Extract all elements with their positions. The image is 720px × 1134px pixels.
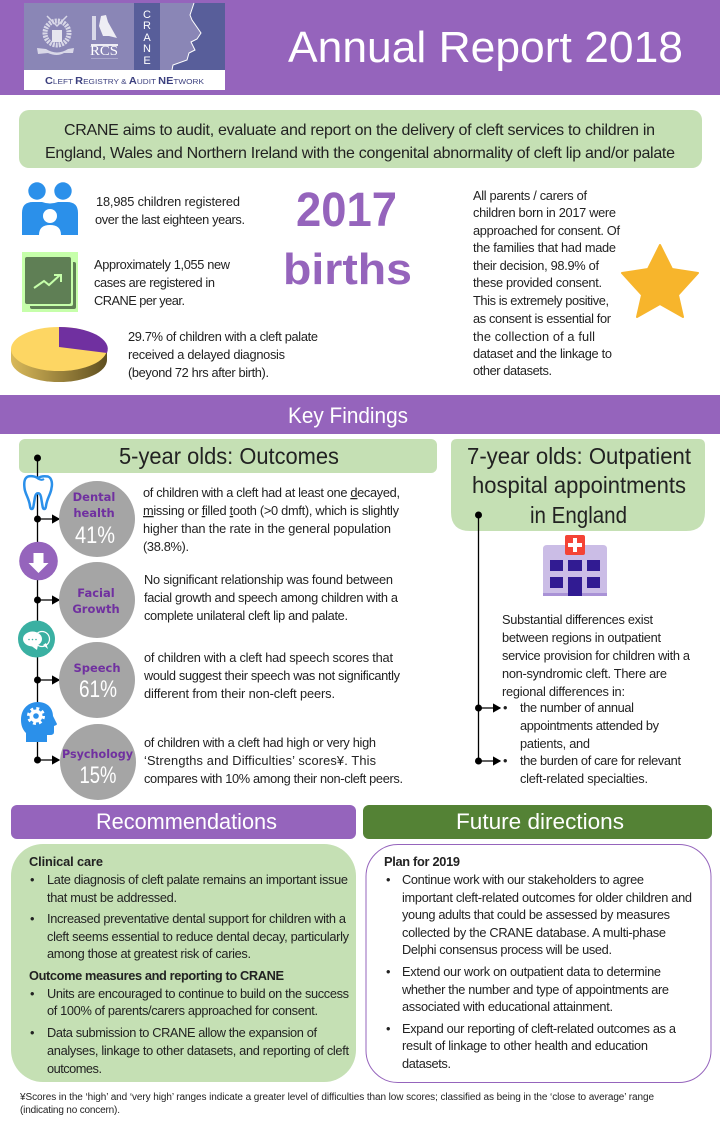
heading: 7-year olds: 7-year olds: Outpatient xyxy=(467,443,692,469)
text: outpatient differences xyxy=(502,612,691,786)
panel: future directions xyxy=(366,844,711,1082)
heading: Future directions xyxy=(363,805,712,839)
heading: 5-year olds xyxy=(19,439,437,473)
text: consent: All parents / carers of xyxy=(473,188,587,203)
heading: Future directions: Future directions xyxy=(456,809,624,834)
panel: recommendations: Late diagnosis of cleft palate remains an important issue xyxy=(47,872,348,887)
intro banner: England, Wales and Northern Ireland with the congenital abnormality of cleft lip and/or palate xyxy=(45,145,675,162)
stat: new cases: cases are registered in xyxy=(94,275,215,290)
panel: recommendations: that must be addressed. xyxy=(47,890,177,905)
logo: CRANE: CLEFT REGISTRY & AUDIT NETWORK xyxy=(45,76,204,87)
text: consent: children born in 2017 were xyxy=(473,205,616,220)
panel: future directions: Plan for 2019 xyxy=(384,854,460,869)
panel: recommendations xyxy=(11,844,356,1082)
panel: recommendations: • xyxy=(30,1025,34,1040)
panel: future directions: important cleft-related outcomes for older children and xyxy=(402,890,692,905)
text: consent: other datasets. xyxy=(473,363,552,378)
panel: future directions: Continue work with our stakeholders to agree xyxy=(402,872,644,887)
panel: future directions: datasets. xyxy=(402,1056,451,1071)
heading: 7-year olds xyxy=(451,439,705,531)
icon: down arrow xyxy=(19,542,58,580)
outcome: speech: different from their non-cleft peers. xyxy=(144,686,335,701)
panel: future directions: • xyxy=(386,872,390,887)
text: consent xyxy=(473,188,620,378)
footnote: (indicating no concern). xyxy=(20,1105,120,1116)
logo: CRANE: RCS xyxy=(90,44,118,59)
panel: future directions: result of linkage to other health and education xyxy=(402,1038,648,1053)
panel: recommendations: cleft seems essential to reduce dental decay, particularly xyxy=(47,929,350,944)
panel: future directions: • xyxy=(386,964,390,979)
text: outpatient differences: the burden of care for relevant xyxy=(520,753,681,768)
panel: recommendations: Clinical care xyxy=(29,854,103,869)
outcome: dental health: missing or filled tooth (>0 dmft), which is slightly xyxy=(143,503,400,518)
heading: 5-year olds: 5-year olds: Outcomes xyxy=(119,443,339,469)
panel: future directions: Delphi consensus process will be used. xyxy=(402,942,612,957)
panel: future directions: Expand our reporting of cleft-related outcomes as a xyxy=(402,1021,677,1036)
panel: recommendations: Outcome measures and reporting to CRANE xyxy=(29,968,284,983)
icon: star xyxy=(622,245,698,317)
header band xyxy=(0,0,720,95)
text: consent: the collection of a full xyxy=(473,329,595,344)
panel: recommendations: • xyxy=(30,986,34,1001)
text: consent: their decision, 98.9% of xyxy=(473,258,599,273)
outcome: facial growth: complete unilateral cleft lip and palate. xyxy=(144,608,348,623)
outcome: dental health: 41% xyxy=(75,522,115,549)
text: outpatient differences: the number of annual xyxy=(520,700,634,715)
outcome: dental health: higher than the rate in the general population xyxy=(143,521,391,536)
panel: recommendations: Data submission to CRANE allow the expansion of xyxy=(47,1025,317,1040)
stat: delayed diagnosis xyxy=(128,329,318,380)
footnote xyxy=(19,1092,654,1116)
logo: CRANE: E xyxy=(143,55,151,67)
text: consent: dataset and the linkage to xyxy=(473,346,612,361)
intro banner: CRANE aims to audit, evaluate and report on the delivery of cleft services to children in xyxy=(64,122,655,139)
panel: future directions: collected by the CRANE database. A multi-phase xyxy=(402,925,666,940)
text: outpatient differences: • xyxy=(503,700,507,715)
pie chart: delayed diagnosis xyxy=(11,327,108,382)
icon: head with gear xyxy=(21,702,57,742)
outcome: facial growth xyxy=(59,562,399,638)
stat: delayed diagnosis: 29.7% of children with a cleft palate xyxy=(128,329,318,344)
text: consent: the families that had made xyxy=(473,240,616,255)
stat: registered children: over the last eighteen years. xyxy=(95,212,245,227)
outcome: dental health xyxy=(59,481,400,557)
outcome: facial growth: facial growth and speech among children with a xyxy=(144,590,399,605)
text: outpatient differences: • xyxy=(503,753,507,768)
text: consent: approached for consent. Of xyxy=(473,223,620,238)
stat: delayed diagnosis: (beyond 72 hrs after birth). xyxy=(128,365,269,380)
outcome: speech: would suggest their speech was not significantly xyxy=(143,668,401,683)
panel: recommendations: outcomes. xyxy=(47,1061,102,1076)
panel: recommendations: of 100% of parents/carers approached for consent. xyxy=(47,1003,318,1018)
text: outpatient differences: between regions in outpatient xyxy=(502,630,661,645)
outcome: facial growth: Facial xyxy=(77,586,115,600)
text: consent: as consent is essential for xyxy=(473,311,612,326)
logo: CRANE: C xyxy=(143,9,151,21)
text: outpatient differences: service provision for children with a xyxy=(502,648,691,663)
outcome: psychology: 15% xyxy=(80,762,116,789)
outcome: psychology: Psychology xyxy=(62,747,133,761)
section bar: Key Findings: Key Findings xyxy=(288,403,408,428)
text: consent: This is extremely positive, xyxy=(473,293,609,308)
logo: CRANE: R xyxy=(143,20,151,32)
panel: recommendations: • xyxy=(30,911,34,926)
text: outpatient differences: cleft-related specialties. xyxy=(520,771,648,786)
text: outpatient differences: patients, and xyxy=(520,736,590,751)
outcome: dental health: health xyxy=(73,506,115,520)
icon: hospital xyxy=(543,535,607,596)
outcome: psychology: ‘Strengths and Difficulties’ scores¥. This xyxy=(144,753,376,768)
outcome: dental health: Dental xyxy=(73,490,115,504)
outcome: dental health: of children with a cleft had at least one decayed, xyxy=(143,485,400,500)
stat: new cases: CRANE per year. xyxy=(94,293,185,308)
stat: new cases xyxy=(94,257,231,308)
logo: CRANE: A xyxy=(143,32,151,44)
outcome: facial growth: No significant relationship was found between xyxy=(144,572,393,587)
panel: future directions: whether the number and type of appointments are xyxy=(401,982,669,997)
icon: speech bubbles xyxy=(18,620,55,658)
timeline: outpatient xyxy=(475,512,500,764)
footnote: ¥Scores in the ‘high’ and ‘very high’ ranges indicate a greater level of difficulties than low scores; classified as being in the ‘close to average’ range xyxy=(19,1092,654,1103)
panel: recommendations: Increased preventative dental support for children with a xyxy=(47,911,347,926)
timeline: outcomes xyxy=(34,454,59,764)
heading: 2017 births: births xyxy=(283,245,412,294)
icon: family xyxy=(22,182,78,235)
heading: 2017 births: 2017 xyxy=(296,184,397,237)
logo: CRANE xyxy=(24,3,225,90)
section bar: Key Findings xyxy=(0,395,720,434)
heading: Recommendations: Recommendations xyxy=(96,809,277,834)
outcome: psychology: compares with 10% among their non-cleft peers. xyxy=(144,771,403,786)
panel: recommendations: among those at greatest risk of caries. xyxy=(47,946,251,961)
outcome: speech: Speech xyxy=(73,661,121,675)
panel: recommendations: • xyxy=(30,872,34,887)
intro banner xyxy=(19,110,702,168)
panel: recommendations: analyses, linkage to other datasets, and reporting of cleft xyxy=(47,1043,349,1058)
stat: registered children xyxy=(95,194,245,227)
stat: delayed diagnosis: received a delayed diagnosis xyxy=(128,347,285,362)
heading: 2017 births xyxy=(283,184,412,294)
outcome: facial growth: Growth xyxy=(72,602,120,616)
heading: 7-year olds: hospital appointments xyxy=(472,472,686,498)
heading: 7-year olds: in England xyxy=(530,502,627,528)
outcome: psychology xyxy=(60,724,403,800)
outcome: speech xyxy=(59,642,401,718)
text: outpatient differences: Substantial differences exist xyxy=(502,612,653,627)
title: Annual Report 2018 xyxy=(288,23,683,72)
stat: new cases: Approximately 1,055 new xyxy=(94,257,231,272)
outcome: dental health: (38.8%). xyxy=(143,539,189,554)
icon: growth chart xyxy=(22,252,78,312)
panel: future directions: Extend our work on outpatient data to determine xyxy=(402,964,661,979)
text: consent: these provided consent. xyxy=(473,275,602,290)
heading: Recommendations xyxy=(11,805,356,839)
text: outpatient differences: appointments attended by xyxy=(520,718,660,733)
icon: tooth xyxy=(24,476,52,509)
stat: registered children: 18,985 children registered xyxy=(96,194,240,209)
panel: future directions: young adults that could be assessed by measures xyxy=(402,907,670,922)
panel: recommendations: Units are encouraged to continue to build on the success xyxy=(47,986,349,1001)
text: outpatient differences: non-syndromic cleft. There are xyxy=(502,666,667,681)
text: outpatient differences: regional differences in: xyxy=(502,684,625,699)
panel: future directions: associated with educational attainment. xyxy=(402,999,613,1014)
outcome: speech: of children with a cleft had speech scores that xyxy=(144,650,393,665)
panel: future directions: • xyxy=(386,1021,390,1036)
outcome: psychology: of children with a cleft had high or very high xyxy=(144,735,376,750)
outcome: speech: 61% xyxy=(79,676,117,703)
logo: CRANE: N xyxy=(143,43,151,55)
